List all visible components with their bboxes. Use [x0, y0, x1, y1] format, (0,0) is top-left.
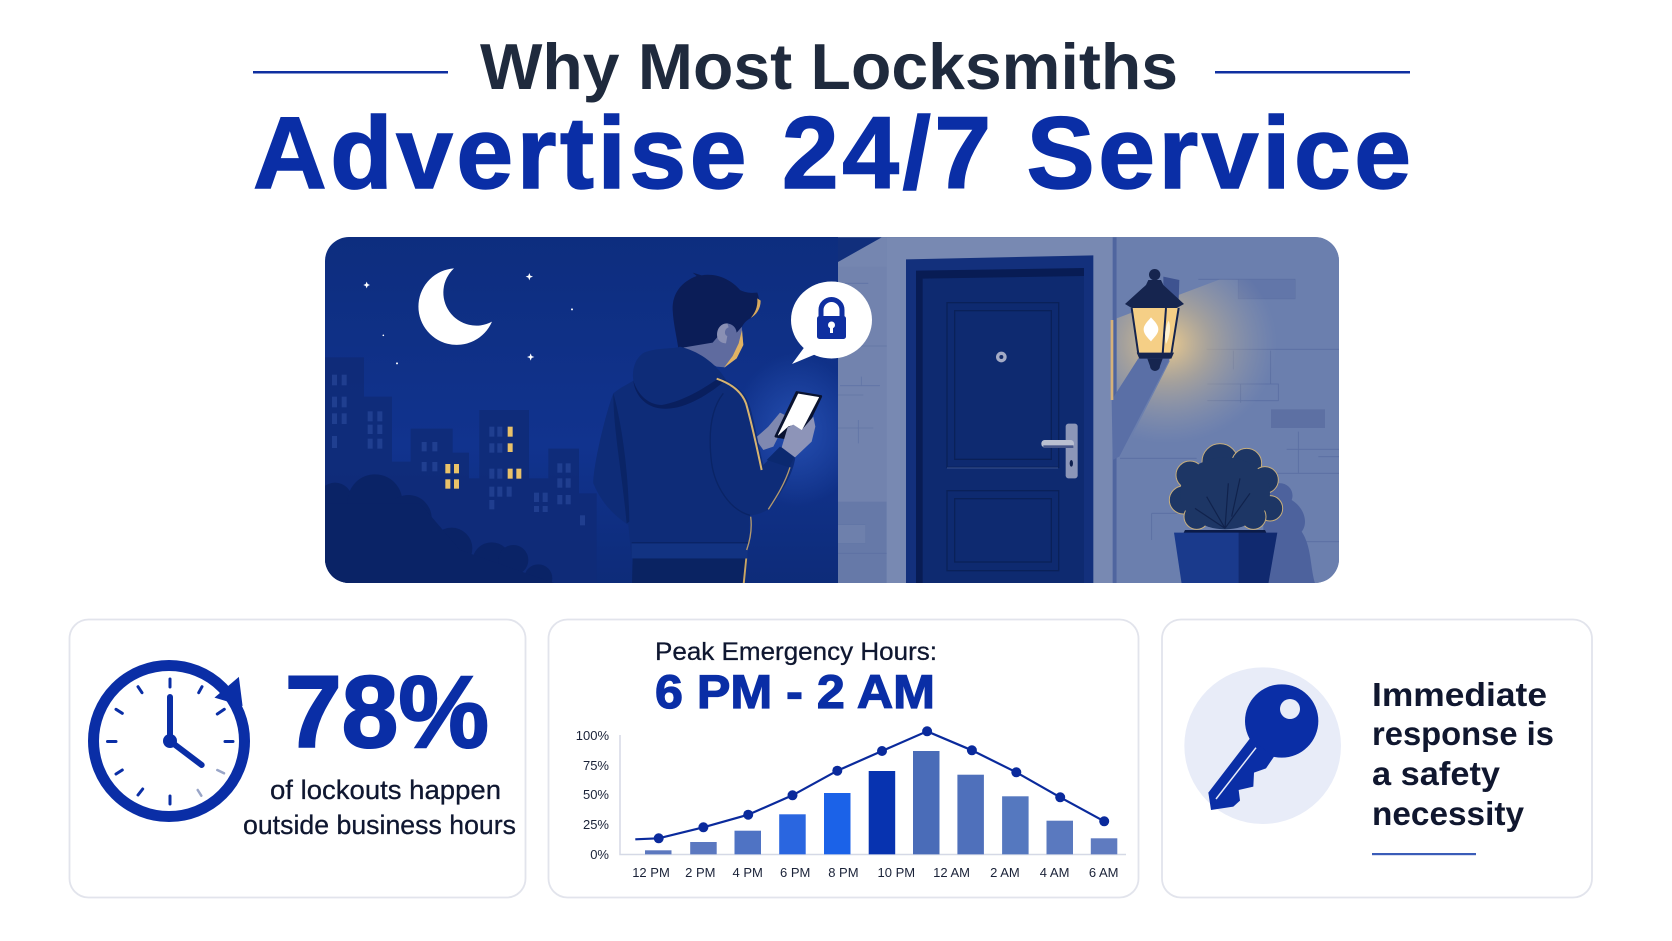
bar and line chart: [576, 726, 1126, 880]
trousers: [632, 558, 746, 583]
house wall: [838, 230, 1345, 590]
stat value: 78%: [285, 655, 489, 769]
panel: immediate response: [1162, 620, 1592, 898]
bar and line chart: 2 PM: [685, 865, 715, 880]
bar and line chart: 12 AM: [933, 865, 970, 880]
potted plant: [1169, 444, 1315, 584]
stat caption: [243, 775, 516, 840]
stars: [363, 273, 573, 364]
title line one: Why Most Locksmiths: [480, 30, 1178, 103]
bar and line chart: 8 PM: [828, 865, 859, 880]
bar and line chart: 50%: [583, 787, 609, 802]
panel: 78% stat: [70, 620, 526, 898]
hair: [673, 273, 759, 348]
safety message: necessity: [1372, 796, 1524, 833]
bar and line chart: 25%: [583, 817, 609, 832]
stat caption: outside business hours: [243, 810, 516, 840]
stat caption: of lockouts happen: [270, 775, 501, 805]
hoodie: [593, 347, 795, 558]
wall lantern: [1125, 269, 1184, 371]
bar and line chart: 0%: [590, 847, 609, 862]
peephole: [996, 352, 1007, 362]
safety message: a safety: [1372, 756, 1500, 793]
lamp glow: [1116, 280, 1265, 431]
bar and line chart: 2 AM: [990, 865, 1020, 880]
door: [906, 255, 1093, 583]
gold rim light: [717, 379, 762, 470]
chart heading: Peak Emergency Hours:: [655, 638, 937, 666]
bar and line chart: 4 PM: [733, 865, 763, 880]
hand back: [757, 412, 784, 450]
bushes: [325, 474, 554, 583]
city skyline: [325, 357, 597, 583]
padlock: [821, 300, 842, 318]
wall bricks: [838, 279, 1339, 553]
safety message: response is: [1372, 716, 1554, 753]
panel: peak emergency hours: [548, 620, 1138, 898]
person: [593, 273, 821, 584]
icon: clock: [94, 666, 244, 816]
peak hours value: 6 PM - 2 AM: [655, 665, 935, 718]
front hand: [782, 417, 815, 457]
bar and line chart: 12 PM: [632, 865, 670, 880]
bar and line chart: 100%: [576, 728, 609, 743]
bar and line chart: 4 AM: [1040, 865, 1069, 880]
title: [253, 30, 1411, 210]
speech bubble with padlock: [791, 282, 872, 364]
safety message: [1372, 677, 1554, 833]
bar and line chart: 6 PM: [780, 865, 810, 880]
bar and line chart: 10 PM: [878, 865, 915, 880]
night scene: [318, 230, 860, 592]
bar and line chart: 75%: [583, 758, 609, 773]
moon: [418, 268, 492, 345]
door handle: [1066, 424, 1078, 478]
neck and face: [684, 323, 744, 368]
phone: [776, 392, 821, 440]
bar and line chart: 6 AM: [1089, 865, 1119, 880]
hero illustration: [318, 230, 1345, 592]
safety message: Immediate: [1372, 677, 1547, 714]
icon: key: [1184, 667, 1341, 824]
title line two: Advertise 24/7 Service: [253, 96, 1411, 210]
